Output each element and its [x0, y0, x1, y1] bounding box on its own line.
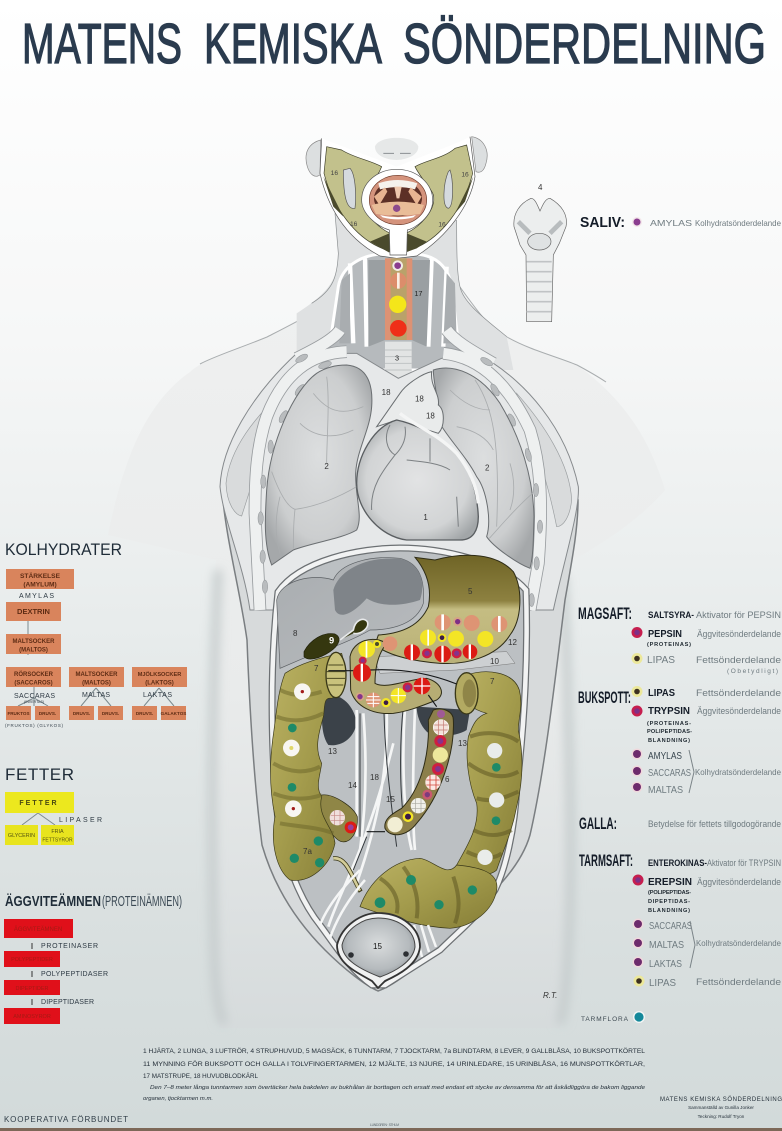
heading: aggviteamnen: ÄGGVITEÄMNEN: [5, 893, 101, 910]
small sugar boxes: GALAKTOS: [161, 711, 186, 716]
pepsin: (PROTEINAS): [647, 642, 691, 648]
lipas: (Obetydligt): [727, 668, 778, 675]
gland ducts: [343, 168, 453, 208]
esophagus: [385, 258, 412, 340]
enzyme labels: LAKTAS: [143, 692, 172, 699]
carbohydrate enzymes: LAKTAS: [649, 958, 682, 970]
lipas: LIPAS: [649, 977, 676, 989]
jaw frame: [320, 137, 475, 258]
box: sucrose: [6, 667, 61, 687]
trypsin: TRYPSIN: [648, 705, 690, 717]
connectors: [18, 602, 174, 706]
panel: pancreatic juice: [578, 686, 781, 796]
larynx: [514, 183, 566, 322]
panel: fats flow: [5, 792, 102, 845]
colon markers: [283, 683, 504, 909]
panel: gastric juice: Aktivator för PEPSIN: [696, 610, 781, 620]
erepsin: (POLIPEPTIDAS-: [648, 890, 691, 896]
gland labels: 16: [331, 170, 338, 177]
box: sucrose: RÖRSOCKER: [14, 671, 54, 678]
box: maltose 2: (MALTOS): [82, 680, 111, 686]
appendix: [333, 858, 361, 892]
pancreas: [373, 652, 515, 673]
gland labels: [331, 170, 469, 229]
erepsin: BLANDNING): [648, 908, 690, 914]
box: lactose: (LAKTOS): [145, 680, 174, 686]
panel: gastric juice: MAGSAFT:: [578, 604, 632, 623]
arrows to colon: [328, 670, 457, 832]
box: free fatty acids: [41, 825, 74, 845]
heading: fetter: FETTER: [5, 765, 74, 784]
lipas: Fettsönderdelande: [696, 688, 781, 699]
gland labels: 16: [350, 221, 358, 228]
lipas: [632, 653, 781, 675]
label 3: 3: [395, 354, 399, 363]
rib bands: [255, 330, 541, 610]
organ number labels: 13: [328, 747, 337, 756]
ascending colon: [270, 653, 345, 880]
footnote: explanation: Den 7–8 meter långa tunntarmen som övertäcker hela bakdelen av bukhålan är borttagen och ersatt med endast ett stycke av densamma för att åskådliggöra de bakom liggande: [150, 1084, 646, 1091]
arrow and proteinaser: PROTEINASER: [41, 943, 98, 950]
box: lactose: MJÖLKSOCKER: [138, 671, 181, 678]
enzyme labels: (INVERTAS): [24, 700, 44, 704]
label amylas: AMYLAS: [19, 593, 54, 600]
head and neck illustration: [297, 137, 566, 378]
neck contour: [312, 213, 507, 337]
neck and shoulders: [297, 213, 513, 370]
box: free fatty acids: FETTSYROR: [42, 838, 73, 844]
heart: [357, 413, 478, 540]
organ number labels: 15: [386, 795, 395, 804]
right lung: [433, 368, 534, 568]
connectors: [22, 813, 55, 825]
dark liver lobe: [333, 558, 422, 615]
arrow and polypeptidaser: POLYPEPTIDASER: [41, 971, 108, 978]
enzyme labels: SACCARAS: [14, 693, 55, 700]
panel: gastric juice: [578, 604, 781, 675]
organ number labels: 18: [370, 773, 379, 782]
great vessels: [377, 372, 443, 433]
box: maltose: [6, 634, 61, 654]
jejunum: [385, 709, 453, 835]
box: proteins: ÄGGVITEÄMNEN: [14, 926, 62, 933]
legend: intestinal flora: TARMFLORA: [581, 1016, 629, 1023]
lipas: LIPAS: [647, 654, 675, 666]
descending colon: [457, 672, 522, 875]
organ number labels: R.T.: [543, 991, 557, 1000]
mouth: [369, 175, 427, 225]
erepsin: DIPEPTIDAS-: [648, 899, 690, 905]
lower torso cavity: [222, 490, 578, 991]
box: fats: FETTER: [19, 800, 59, 807]
sugar footnote: (FRUKTOS) (GLYKOS): [5, 723, 64, 728]
label 18 lower: 18: [426, 411, 435, 420]
box: maltose: (MALTOS): [19, 648, 48, 654]
body edge shading: [212, 570, 571, 1024]
label 2 left: 2: [324, 462, 329, 471]
ileum: [317, 795, 357, 842]
lipas: [634, 976, 781, 989]
panel: saliva: [580, 214, 781, 231]
liver: [277, 558, 424, 668]
small sugar boxes: DRUVS.: [39, 711, 56, 716]
imprint right: [660, 1096, 782, 1119]
legend: intestinal flora: [581, 1011, 645, 1023]
left lung: [265, 365, 372, 565]
label 18: 18: [382, 388, 391, 397]
lipas: LIPAS: [648, 687, 675, 699]
carbohydrate enzymes: [632, 918, 781, 970]
pepsin: [632, 627, 781, 648]
organ number labels: 7: [314, 664, 319, 673]
windpipe: [385, 342, 412, 378]
box: dextrin: DEXTRIN: [17, 607, 50, 616]
gland labels: 16: [438, 222, 446, 229]
box: maltose 2: [69, 667, 124, 687]
organ number labels: 7a: [303, 847, 312, 856]
box: free fatty acids: FRIA: [51, 829, 64, 835]
footnote: organ key: [143, 1048, 646, 1080]
panel: saliva: AMYLAS: [650, 218, 692, 228]
imprint right: MATENS KEMISKA SÖNDERDELNING: [660, 1096, 782, 1103]
title: MATENS: [22, 12, 182, 76]
box: starch: STÄRKELSE: [20, 572, 61, 580]
panel: gastric juice: SALTSYRA-: [648, 610, 694, 620]
duodenum: [350, 639, 441, 714]
sigmoid colon: [360, 858, 497, 928]
carbohydrate enzymes: MALTAS: [649, 939, 684, 951]
vessels beside bladder: [320, 870, 436, 957]
box: glycerin: GLYCERIN: [8, 833, 35, 839]
ears: [306, 137, 487, 176]
body silhouette: [108, 287, 665, 1028]
abdominal cavity: [272, 548, 527, 985]
duodenum markers: [356, 678, 430, 707]
organ number labels: 13: [458, 739, 467, 748]
erepsin: [632, 874, 781, 914]
label 9: 9: [329, 635, 334, 645]
panel: intestinal juice: TARMSAFT:: [579, 851, 633, 870]
panel: intestinal juice: [579, 851, 781, 989]
small sugar boxes: [6, 706, 186, 720]
panel: bile: [579, 814, 781, 833]
carbohydrate enzymes: [632, 748, 781, 796]
title: [22, 12, 766, 76]
heading: aggviteamnen: [5, 893, 182, 910]
colon folds right: [467, 733, 518, 858]
mouth opening: [362, 169, 433, 255]
salivary glands: [324, 147, 390, 252]
descending colon mouth: [455, 673, 478, 714]
small sugar boxes: DRUVS.: [73, 711, 90, 716]
larynx: 4: [538, 183, 543, 192]
heading: aggviteamnen: (PROTEINÄMNEN): [102, 893, 182, 910]
bladder: [337, 913, 420, 988]
organ number labels: 14: [348, 781, 357, 790]
footnote: organ key: 1 HJÄRTA, 2 LUNGA, 3 LUFTRÖR, 4 STRUPHUVUD, 5 MAGSÄCK, 6 TUNNTARM, 7 TJOCKTARM, 7a BLINDTARM, 8 LEVER, 9 GALLBLÅSA, 10 BUKSPOTTKÖRTEL: [143, 1048, 646, 1055]
panel: saliva: SALIV:: [580, 214, 625, 231]
gland shadows: [323, 177, 473, 253]
footnote: organ key: 11 MYNNING FÖR BUKSPOTT OCH GALLA I TOLVFINGERTARMEN, 12 MJÄLTE, 13 NJURE, 14 URINLEDARE, 15 URINBLÅSA, 16 MUNSPOTTKÖRTLAR,: [143, 1061, 645, 1068]
box: amino acids: AMINOSYROR: [13, 1014, 51, 1020]
lipas: Fettsönderdelande: [696, 655, 781, 666]
organ number labels: 12: [508, 638, 517, 647]
bottom edge: [0, 1128, 782, 1131]
label 18 upper: 18: [415, 395, 424, 404]
panel: proteins flow: [4, 919, 108, 1024]
jaw outline: [320, 137, 475, 258]
trypsin: [632, 705, 781, 744]
box: starch: (AMYLUM): [23, 582, 57, 588]
small sugar boxes: DRUVS.: [136, 711, 153, 716]
rib spots: [258, 352, 543, 607]
footnote: explanation: [143, 1084, 646, 1102]
ascending colon mouth: [326, 652, 346, 698]
pepsin: PEPSIN: [648, 628, 682, 640]
box: sucrose: (SACCAROS): [14, 680, 53, 686]
label lipaser: LIPASER: [59, 817, 102, 824]
label 17: 17: [414, 289, 422, 298]
gallbladder: [304, 634, 339, 659]
printer: LUNDGREN · STHLM: [370, 1123, 399, 1127]
small intestine markers: [330, 710, 449, 833]
organ number labels: [293, 587, 557, 1000]
trypsin: (PROTEINAS-: [647, 721, 691, 727]
chest: [220, 330, 578, 610]
organ number labels: 7: [490, 677, 495, 686]
stomach: [375, 555, 520, 664]
abdominal rim: [272, 548, 527, 985]
organ number labels: 8: [293, 629, 298, 638]
carbohydrate enzymes: SACCARAS: [648, 767, 691, 779]
abdominal organs: [270, 555, 522, 928]
box: maltose 2: MALTSOCKER: [76, 672, 118, 678]
erepsin: EREPSIN: [648, 876, 692, 888]
box: lactose: [132, 667, 187, 687]
gland labels: 16: [461, 172, 469, 179]
colon folds left: [273, 690, 333, 833]
organ number labels: 6: [445, 775, 450, 784]
enzyme labels: [14, 692, 172, 704]
nose: [375, 138, 418, 160]
box: dextrin: [6, 602, 61, 621]
panel: pancreatic juice: BUKSPOTT:: [578, 688, 631, 707]
chest wall: [220, 353, 578, 610]
neck opening: [317, 254, 473, 370]
bladder: 15: [373, 942, 382, 951]
box: starch: [6, 569, 74, 589]
organ number labels: 5: [468, 587, 473, 596]
box: dipeptides: DIPEPTIDER: [15, 986, 49, 992]
windpipe rings: [385, 350, 412, 370]
small sugar boxes: FRUKTOS: [7, 711, 30, 716]
stomach markers: [353, 614, 507, 682]
title: KEMISKA: [204, 12, 382, 76]
label 1: 1: [423, 513, 428, 522]
lipas: Fettsönderdelande: [696, 977, 781, 988]
shoulder muscle right: [517, 393, 572, 527]
bile duct: [340, 619, 368, 640]
imprint right: Teckning: Rudolf Tryon: [698, 1114, 745, 1119]
carbohydrate enzymes: AMYLAS: [648, 750, 682, 762]
panel: bile: GALLA:: [579, 814, 617, 833]
publisher: KOOPERATIVA FÖRBUNDET: [4, 1115, 128, 1124]
heading: kolhydrater: KOLHYDRATER: [5, 541, 122, 559]
trypsin: BLANDNING): [648, 738, 690, 744]
imprint right: Sammanställd av Gunilla Jonker: [688, 1105, 754, 1110]
enzyme labels: MALTAS: [82, 692, 110, 699]
small sugar boxes: DRUVS.: [102, 711, 119, 716]
lipas: [632, 686, 781, 699]
box: maltose: MALTSOCKER: [13, 639, 55, 645]
blood vessels and ureters: [328, 707, 415, 927]
sigmoid folds: [380, 867, 459, 923]
organ number labels: 10: [490, 657, 499, 666]
label 2 right: 2: [485, 463, 490, 472]
kidneys: [322, 695, 470, 745]
panel: intestinal juice: ENTEROKINAS-: [648, 858, 707, 868]
panel: carbohydrates flow: [5, 569, 187, 728]
rib band outlines: [255, 330, 541, 610]
shoulder muscle left: [226, 393, 280, 516]
box: polypeptides: POLYPEPTIDER: [11, 957, 53, 963]
carbohydrate enzymes: SACCARAS: [649, 920, 692, 932]
carbohydrate enzymes: MALTAS: [648, 784, 683, 796]
footnote: explanation: organen, tjocktarmen m.m.: [143, 1096, 213, 1102]
shoulder contour: [200, 287, 606, 382]
trypsin: POLIPEPTIDAS-: [647, 729, 692, 735]
arrow and dipeptidaser: DIPEPTIDASER: [41, 999, 94, 1006]
footnote: organ key: 17 MATSTRUPE, 18 HUVUDBLODKÄRL: [143, 1073, 259, 1080]
